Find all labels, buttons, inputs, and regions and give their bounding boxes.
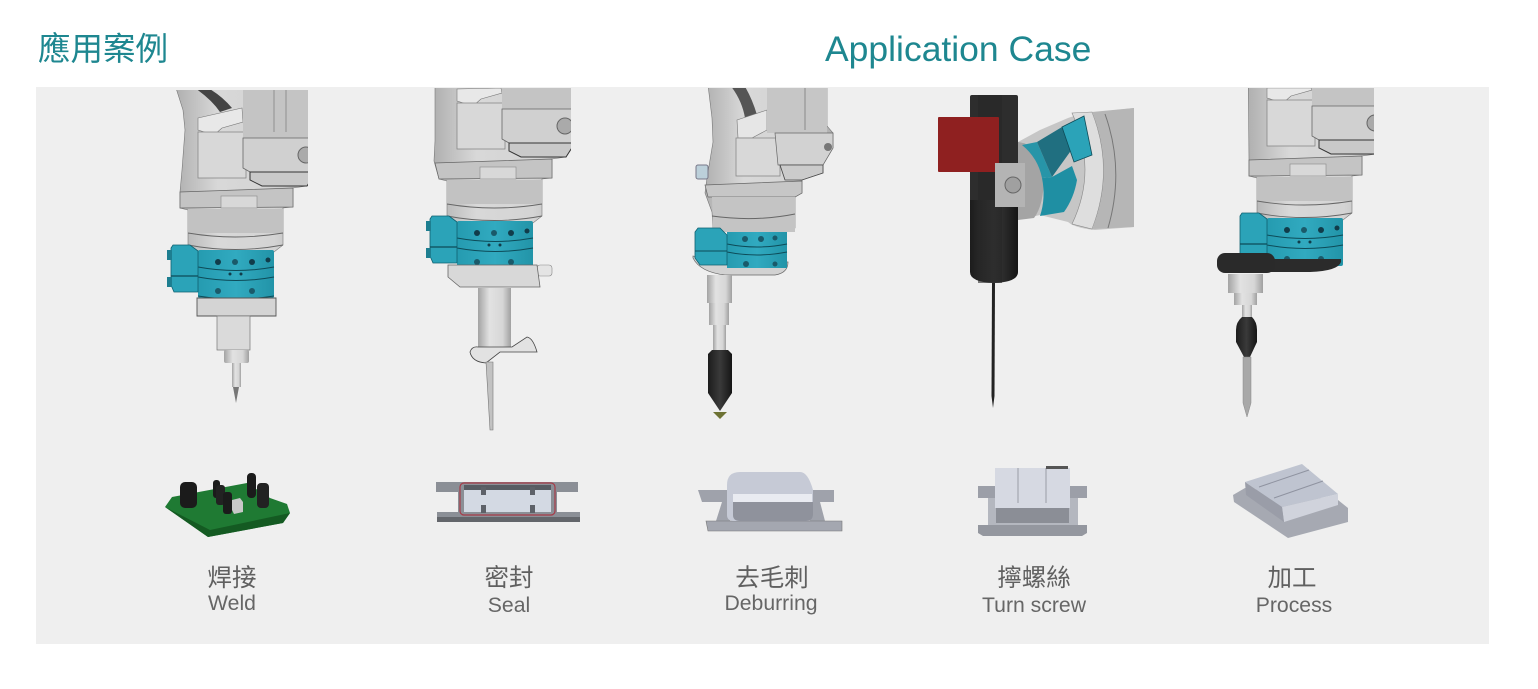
- blue clamp: [695, 228, 787, 268]
- blue clamp: [426, 216, 533, 269]
- base plate: [693, 256, 788, 275]
- label: weld: Weld: [208, 592, 256, 615]
- part: screw housing: [978, 466, 1087, 536]
- mounting plate: [995, 163, 1025, 207]
- label: seal: [484, 564, 534, 617]
- label: deburring: Deburring: [724, 592, 818, 615]
- label: weld: 焊接: [208, 564, 256, 592]
- label: weld: [208, 564, 256, 615]
- robot: process: [1217, 88, 1374, 417]
- robot: turn screw: [938, 95, 1134, 408]
- tool: process spindle: [1217, 253, 1341, 417]
- label: process: 加工: [1268, 564, 1316, 592]
- panel: application cases: [36, 87, 1489, 644]
- label: turn screw: 擰螺絲: [997, 564, 1071, 592]
- blue clamp: [1240, 213, 1343, 266]
- heading: English title: Application Case: [825, 29, 1091, 69]
- part: circuit board: [165, 473, 290, 537]
- label: deburring: [724, 564, 818, 615]
- label: seal: Seal: [488, 594, 530, 617]
- part: deburring housing: [698, 472, 842, 531]
- tool: seal dispenser: [448, 265, 552, 430]
- tool: deburring cutter: [707, 275, 732, 419]
- label: process: Process: [1256, 594, 1332, 617]
- heading: Chinese title: 應用案例: [38, 31, 168, 67]
- red block: [938, 117, 999, 172]
- label: deburring: 去毛刺: [735, 564, 809, 592]
- robot: seal: [426, 88, 571, 430]
- needle: [992, 283, 995, 408]
- label: process: [1256, 564, 1332, 617]
- blue clamp: [167, 245, 274, 299]
- tool: weld gun: [197, 298, 276, 403]
- robot: deburring: [693, 85, 833, 419]
- label: turn screw: Turn screw: [982, 594, 1087, 617]
- label: turn screw: [982, 564, 1087, 617]
- part: sealed housing: [436, 482, 580, 522]
- robot: weld: [167, 88, 316, 403]
- part: process housing: [1233, 464, 1348, 538]
- label: seal: 密封: [484, 564, 534, 592]
